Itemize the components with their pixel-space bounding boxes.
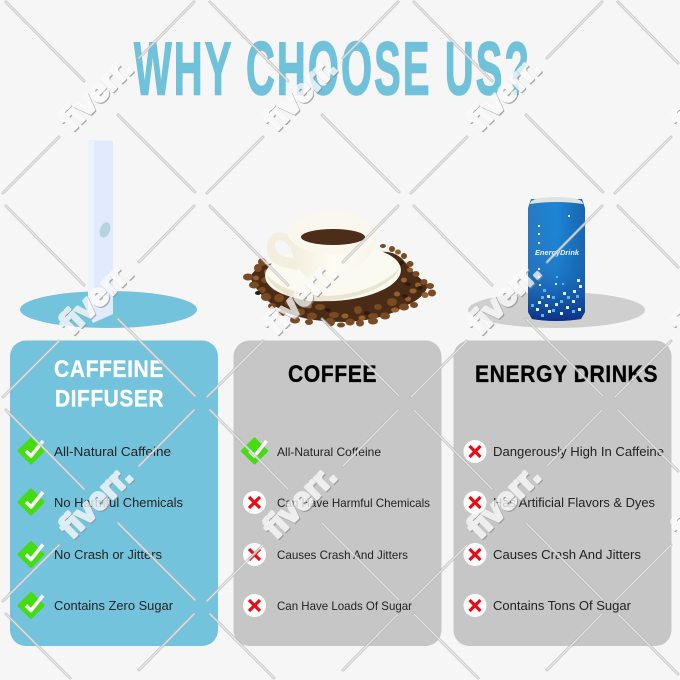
watermark text <box>51 49 680 545</box>
icons: red crosses <box>464 440 486 617</box>
list: diffuser benefits: Contains Zero Sugar <box>54 598 174 613</box>
list: diffuser benefits: No Harmful Chemicals <box>54 495 183 510</box>
list: energy drink drawbacks: Dangerously High In Caffeine <box>493 444 664 459</box>
icons: red crosses <box>243 491 266 617</box>
list: coffee drawbacks: Causes Crash And Jitters <box>277 548 408 562</box>
list: coffee drawbacks: All-Natural Coffeine <box>277 445 381 459</box>
icon: green check <box>242 439 266 463</box>
list: coffee drawbacks <box>277 445 430 613</box>
list: coffee drawbacks: Can Have Loads Of Sugar <box>277 599 412 613</box>
watermark text: fiverr. <box>459 49 547 137</box>
product: energy drink can <box>468 197 645 328</box>
icons: green checks <box>19 439 43 618</box>
watermark text: fiverr. <box>51 457 139 545</box>
product: coffee cup with beans <box>243 212 436 328</box>
watermark text: fiverr. <box>255 457 343 545</box>
heading: caffeine diffuser: CAFFEINE <box>54 356 164 383</box>
list: energy drink drawbacks: Causes Crash And Jitters <box>493 547 641 562</box>
list: energy drink drawbacks: Has Artificial Flavors & Dyes <box>493 495 655 510</box>
list: diffuser benefits <box>54 444 183 613</box>
list: diffuser benefits: No Crash or Jitters <box>54 547 162 562</box>
panel: energy drinks <box>454 340 672 646</box>
panel: coffee <box>234 340 442 646</box>
list: coffee drawbacks: Can Have Harmful Chemicals <box>277 496 430 510</box>
panel: caffeine diffuser <box>10 340 218 646</box>
watermark text: fiverr. <box>459 457 547 545</box>
watermark text: fiverr. <box>255 49 343 137</box>
product: caffeine diffuser on blue disc <box>20 140 197 328</box>
heading: caffeine diffuser <box>54 356 164 412</box>
watermark text: fiverr. <box>255 253 343 341</box>
list: diffuser benefits: All-Natural Caffeine <box>54 444 171 459</box>
can label text: EnergyDrink <box>535 248 580 257</box>
heading: caffeine diffuser: DIFFUSER <box>55 386 164 412</box>
list: energy drink drawbacks <box>493 444 664 613</box>
heading: coffee: COFFEE <box>288 361 377 388</box>
watermark text: fiverr. <box>51 253 139 341</box>
watermark text: fiverr. <box>459 253 547 341</box>
watermark text: fiverr. <box>51 49 139 137</box>
list: energy drink drawbacks: Contains Tons Of Sugar <box>493 598 632 613</box>
